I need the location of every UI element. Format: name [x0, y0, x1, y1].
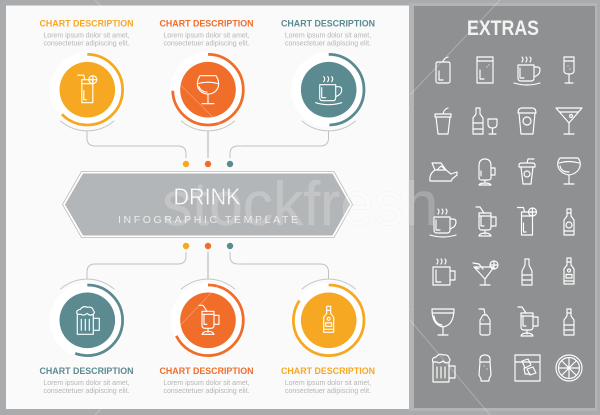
text block 3: Lorem ipsum dolor sit amet,	[285, 33, 371, 40]
icon: can with straw	[436, 57, 450, 83]
chart 3: coffee	[291, 52, 366, 131]
icon: whisky with ice	[515, 355, 540, 381]
text block 6: CHART DESCRIPTION	[281, 366, 375, 377]
text block 5: consectetuer adipiscing elit.	[164, 388, 250, 395]
central banner	[62, 172, 352, 238]
icon: beer bottle	[564, 209, 574, 235]
text block 2: CHART DESCRIPTION	[160, 18, 254, 30]
text block 5: CHART DESCRIPTION	[160, 366, 254, 377]
text block 3: CHART DESCRIPTION	[281, 18, 375, 30]
icon: liquor bottle	[564, 258, 574, 284]
chart 5: irish coffee	[170, 279, 246, 358]
icon: juice glass	[518, 208, 536, 235]
watermark: stockfresh	[162, 170, 438, 239]
icon: iced coffee cup	[519, 159, 535, 184]
icon: goblet	[558, 158, 580, 184]
panel: main infographic	[6, 6, 409, 409]
icon: soda cup	[435, 108, 451, 134]
icon: bottle with straw	[479, 309, 490, 335]
icon: soda bottle	[522, 259, 532, 285]
text block 4: consectetuer adipiscing elit.	[44, 388, 130, 395]
extras icon grid	[430, 57, 582, 382]
icon: coffee cup	[514, 57, 540, 85]
connector dots: top	[183, 161, 233, 167]
icon: beer mug	[432, 354, 455, 382]
icon: martini	[556, 108, 582, 134]
text block 5	[160, 366, 254, 395]
text block 1	[40, 18, 134, 48]
icon: wine glass	[432, 309, 454, 335]
icon: tea cup	[430, 209, 456, 237]
icon: tall glass	[477, 57, 493, 83]
connector dots: bottom	[183, 243, 233, 249]
icon: ale bottle	[564, 309, 574, 335]
text block 1: Lorem ipsum dolor sit amet,	[43, 33, 130, 40]
icon: latte glass	[479, 159, 495, 185]
icon: citrus slice	[556, 355, 582, 381]
chart 2: wine	[170, 52, 246, 131]
text block 3	[281, 18, 375, 48]
panel: extras	[409, 3, 597, 411]
text block 4	[40, 366, 134, 395]
text block 4: CHART DESCRIPTION	[40, 366, 134, 377]
icon: cocktail with citrus	[473, 261, 498, 285]
icon: coffee mug	[433, 259, 455, 285]
text block 5: Lorem ipsum dolor sit amet,	[163, 380, 250, 387]
connectors: bottom	[87, 252, 328, 279]
text block 3: consectetuer adipiscing elit.	[285, 41, 371, 48]
text block 1: CHART DESCRIPTION	[40, 18, 134, 30]
banner subtitle: INFOGRAPHIC TEMPLATE	[118, 214, 298, 226]
text block 2	[160, 18, 254, 48]
text block 1: consectetuer adipiscing elit.	[44, 41, 130, 48]
chart 6: bottle	[291, 279, 366, 358]
icon: beer glass	[479, 355, 491, 381]
text block 6: Lorem ipsum dolor sit amet,	[285, 380, 371, 387]
banner title: DRINK	[174, 184, 241, 210]
icon: kettle	[430, 163, 457, 181]
icon: takeaway coffee	[518, 108, 536, 134]
text block 2: consectetuer adipiscing elit.	[164, 41, 250, 48]
text block 6	[281, 366, 375, 395]
text block 2: Lorem ipsum dolor sit amet,	[163, 33, 250, 40]
connectors: top	[87, 131, 328, 158]
icon: glass mug with straw	[518, 307, 538, 336]
extras heading: EXTRAS	[467, 17, 539, 40]
chart 4: beer	[50, 279, 125, 358]
text block 6: consectetuer adipiscing elit.	[285, 388, 371, 395]
icon: champagne flute	[564, 57, 574, 83]
icon: hot cocktail glass	[476, 207, 496, 236]
icon: bottle and wine glass	[473, 108, 497, 134]
chart 1: juice	[50, 52, 125, 131]
text block 4: Lorem ipsum dolor sit amet,	[43, 380, 130, 387]
